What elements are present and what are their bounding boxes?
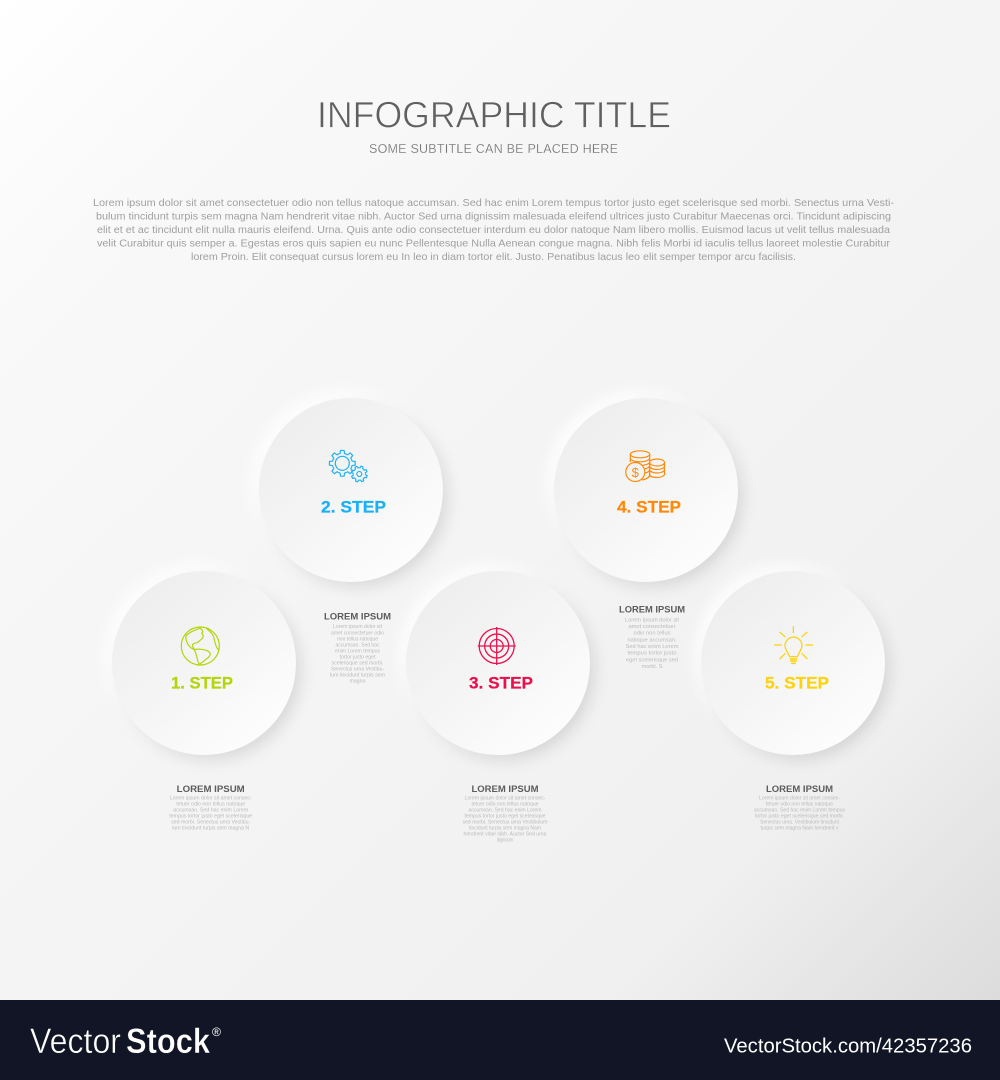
footer bar	[0, 1000, 1000, 1080]
icon: coins	[626, 451, 664, 482]
text block: step 5 caption: tortor justo eget scelerisque sed morbi.	[755, 813, 844, 819]
text block: step 1 caption: tempus tortor justo eget scelerisque	[169, 813, 252, 819]
text block: step 4 caption: LOREM IPSUM	[619, 605, 685, 616]
footer logo	[30, 1022, 221, 1061]
step 3 label: 3. STEP	[469, 674, 533, 692]
text block: step 1 caption: sed morbi. Senectus urna Vestibu-	[171, 819, 250, 825]
intro paragraph: velit Curabitur quis semper a. Egestas eros quis sapien eu nunc Pellentesque Nulla Aenean congue magna. Nibh felis Morbi id iaculis tellus laoreet molestie Curabitur	[97, 238, 891, 250]
text block: step 4 caption	[619, 605, 685, 670]
text block: step 2 caption: lum tincidunt turpis sem	[330, 672, 385, 678]
step 2 label: 2. STEP	[321, 498, 386, 516]
text block: step 2 caption: amet consectetuer odio	[331, 630, 384, 636]
intro paragraph: Lorem ipsum dolor sit amet consectetuer odio non tellus natoque accumsan. Sed hac enim Lorem tempus tortor justo eget scelerisque sed morbi. Senectus urna Vesti-	[93, 198, 894, 209]
footer logo: Stock	[126, 1022, 210, 1061]
text block: step 4 caption: morbi. S	[642, 664, 663, 670]
intro paragraph: lorem Proin. Elit consequat cursus lorem eu In leo in diam tortor elit. Justo. Penatibus lacus leo elit semper tempor arcu facilisis.	[191, 252, 796, 263]
text block: step 2 caption: Senectus urna Vestibu-	[331, 666, 384, 672]
text block: step 1 caption: tetuer odio non tellus natoque	[176, 801, 245, 807]
text block: step 3 caption: Lorem ipsum dolor sit amet consec-	[464, 795, 546, 801]
intro paragraph: elit et et ac tincidunt elit nulla mauris eleifend. Urna. Quis ante odio consectetuer interdum eu dolor natoque Nam libero mollis. Euismod lacus ut velit tellus malesuada	[97, 225, 890, 236]
text block: step 2 caption: tortor justo eget	[340, 654, 376, 660]
text block: step 5 caption	[754, 784, 845, 831]
icon: globe	[181, 627, 219, 665]
text block: step 1 caption: LOREM IPSUM	[177, 784, 245, 795]
panel: step 2 circle	[253, 392, 447, 586]
text block: step 2 caption: enim Lorem tempus	[335, 648, 380, 654]
intro paragraph: bulum tincidunt turpis sem magna Nam hendrerit vitae nibh. Auctor Sed urna dignissim malesuada eleifend ultrices justo Curabitur Maecenas orci. Tincidunt adipiscing	[96, 212, 891, 222]
icon: dollar sign: $	[632, 465, 640, 480]
text block: step 3 caption: LOREM IPSUM	[472, 784, 539, 795]
text block: step 3 caption: tempus tortor justo eget scelerisque	[464, 813, 546, 819]
text block: step 2 caption: Lorem ipsum dolor sit	[333, 624, 382, 630]
text block: step 5 caption: LOREM IPSUM	[766, 784, 833, 795]
text block: step 3 caption: accumsan. Sed hac enim Lorem	[468, 807, 542, 813]
icon: target	[478, 627, 516, 665]
title: INFOGRAPHIC TITLE	[317, 94, 671, 136]
panel: step 1 circle	[106, 565, 300, 759]
step 1 label: 1. STEP	[171, 674, 233, 692]
text block: step 2 caption: scelerisque sed morbi.	[332, 660, 384, 666]
text block: step 1 caption: lum tincidunt turpis sem magna N	[172, 825, 249, 831]
text block: step 5 caption: turpis sem magna Nam hendrerit v	[760, 825, 839, 831]
icon: light bulb	[775, 627, 813, 663]
intro paragraph	[93, 198, 894, 263]
footer logo: Vector	[30, 1022, 121, 1061]
step 5 label: 5. STEP	[765, 674, 829, 692]
text block: step 4 caption: amet consectetuer	[628, 624, 676, 630]
text block: step 1 caption: accumsan. Sed hac enim Lorem	[173, 807, 249, 813]
text block: step 5 caption: Senectus urna. Vestibulum tincidunt	[760, 819, 839, 825]
step 4 label: 4. STEP	[617, 498, 681, 516]
text block: step 2 caption: magna	[350, 678, 366, 684]
text block: step 4 caption: Lorem ipsum dolor sit	[625, 617, 679, 623]
text block: step 3 caption	[462, 784, 548, 843]
footer logo: ®	[212, 1025, 221, 1039]
text block: step 1 caption: Lorem ipsum dolor sit amet consec-	[170, 795, 252, 801]
text block: step 4 caption: eget scelerisque sed	[626, 657, 678, 663]
text block: step 4 caption: natoque accumsan.	[628, 637, 677, 643]
text block: step 4 caption: odio non tellus	[634, 631, 671, 637]
text block: step 3 caption: sed morbi. Senectus urna Vestibulum	[462, 819, 548, 825]
subtitle: SOME SUBTITLE CAN BE PLACED HERE	[369, 142, 618, 156]
text block: step 4 caption: tempus tortor justo	[628, 651, 676, 657]
text block: step 4 caption: Sed hac enim Lorem	[626, 644, 679, 650]
text block: step 3 caption: dignissim	[497, 837, 513, 843]
panel: step 5 circle	[695, 565, 889, 759]
text block: step 2 caption	[324, 612, 391, 684]
text block: step 5 caption: Lorem ipsum dolor sit amet consec-	[759, 795, 840, 801]
footer image id: VectorStock.com/42357236	[724, 1036, 972, 1058]
text block: step 3 caption: tetuer odio non tellus natoque	[472, 801, 538, 807]
panel: step 4 circle	[548, 392, 742, 586]
text block: step 2 caption: non tellus natoque	[337, 636, 378, 642]
icon: gears	[329, 450, 370, 484]
text block: step 3 caption: tincidunt turpis sem magna Nam	[469, 825, 541, 831]
text block: step 2 caption: accumsan. Sed hac	[336, 642, 380, 648]
text block: step 3 caption: hendrerit vitae nibh. Auctor Sed urna	[464, 831, 547, 837]
panel: step 3 circle	[400, 565, 594, 759]
text block: step 1 caption	[169, 784, 252, 831]
text block: step 5 caption: accumsan. Sed hac enim Lorem tempus	[754, 807, 845, 813]
text block: step 5 caption: tetuer odio non tellus natoque	[766, 801, 833, 807]
text block: step 2 caption: LOREM IPSUM	[324, 612, 391, 622]
